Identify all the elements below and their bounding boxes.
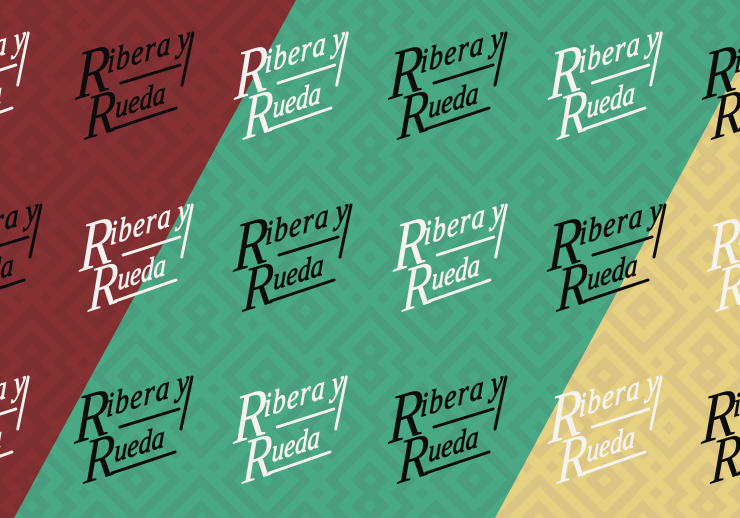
wordmark: row 2 column 3 black: ueda: [273, 248, 324, 297]
wordmark: row 3 column 5 white: y: [640, 361, 659, 405]
wordmark: row 1 column 2 black: R: [74, 28, 112, 116]
wordmark: row 3 column 5 white: ueda: [586, 419, 636, 470]
wordmark: row 1 column 2 black: ueda: [115, 76, 166, 125]
wordmark: row 2 column 4 white: R: [400, 246, 434, 326]
wordmark: row 3 column 4 black: ibera: [420, 367, 486, 425]
wordmark: row 2 column 3 black: R: [241, 246, 275, 326]
wordmark: row 3 column 5 white: R: [555, 418, 589, 498]
wordmark: row 3 column 4 black: R: [396, 418, 430, 498]
wordmark: row 1 column 3 white: ibera: [264, 23, 328, 81]
wordmark: row 3 column 4 black: [387, 348, 506, 498]
wordmark: row 1 column 5 white: y: [640, 17, 659, 61]
wordmark: row 1 column 2 black: y: [170, 18, 191, 61]
wordmark: row 2 column 5 black: [546, 176, 665, 326]
wordmark: row 1 column 4 black: R: [387, 28, 425, 116]
wordmark: row 3 column 4 black: y: [483, 362, 504, 405]
wordmark: row 1 column 3 white: [233, 3, 347, 154]
wordmark: row 1 column 4 black: ueda: [428, 76, 479, 125]
wordmark: row 2 column 1 black: y: [18, 190, 39, 233]
wordmark: row 3 column 1 white: [0, 347, 28, 498]
wordmark: row 1 column 5 white: [547, 3, 661, 154]
wordmark: row 1 column 3 white: ueda: [272, 75, 322, 126]
wordmark: row 3 column 3 white: R: [232, 371, 268, 460]
wordmark: row 3 column 6 black: [700, 348, 740, 498]
wordmark: row 1 column 5 white: R: [555, 74, 589, 154]
wordmark: row 2 column 1 black: [0, 176, 41, 326]
wordmark: row 1 column 5 white: R: [547, 27, 583, 116]
wordmark: row 2 column 2 white: ueda: [117, 247, 167, 298]
wordmark: row 2 column 3 black: y: [328, 190, 349, 233]
panel: dark red diagonal area: [0, 0, 296, 518]
wordmark: row 3 column 2 black: R: [82, 418, 116, 498]
wordmark: row 1 column 4 black: [387, 4, 506, 154]
wordmark: row 2 column 3 black: ibera: [265, 195, 331, 253]
wordmark: row 2 column 5 black: R: [555, 246, 589, 326]
wordmark: row 1 column 4 black: ibera: [420, 23, 486, 81]
wordmark: row 3 column 3 white: R: [240, 418, 274, 498]
wordmark: row 2 column 6 white: [706, 175, 740, 326]
wordmark: row 3 column 2 black: ueda: [114, 420, 165, 469]
wordmark: row 3 column 4 black: R: [387, 372, 425, 460]
wordmark: row 1 column 6 black: [701, 4, 740, 154]
wordmark: row 1 column 3 white: y: [326, 17, 345, 61]
wordmark: row 1 column 3 white: R: [241, 74, 275, 154]
wordmark: row 2 column 3 black: R: [232, 200, 270, 288]
wordmark: row 3 column 2 black: [73, 348, 192, 498]
wordmark: row 1 column 4 black: y: [483, 18, 504, 61]
wordmark: row 3 column 3 white: ibera: [263, 367, 327, 425]
wordmark: row 2 column 4 white: y: [485, 189, 504, 233]
wordmark: row 2 column 2 white: y: [171, 189, 190, 233]
wordmark: row 1 column 4 black: R: [396, 74, 430, 154]
wordmark: row 3 column 2 black: ibera: [106, 367, 172, 425]
wordmark: row 3 column 6 black: R: [700, 372, 738, 460]
wordmark: row 2 column 2 white: ibera: [109, 195, 173, 253]
wordmark: row 1 column 2 black: [74, 4, 193, 154]
wordmark: row 3 column 2 black: y: [169, 362, 190, 405]
wordmark: row 1 column 2 black: ibera: [107, 23, 173, 81]
wordmark: row 3 column 3 white: ueda: [271, 419, 321, 470]
wordmark: row 1 column 1 white: y: [7, 17, 26, 61]
wordmark: row 2 column 2 white: R: [86, 246, 120, 326]
wordmark: row 3 column 4 black: ueda: [428, 420, 479, 469]
wordmark: row 1 column 3 white: R: [233, 27, 269, 116]
wordmark: row 3 column 5 white: ibera: [578, 367, 642, 425]
wordmark: row 2 column 4 white: [392, 175, 506, 326]
wordmark: row 3 column 3 white: [232, 347, 346, 498]
wordmark: row 2 column 2 white: [78, 175, 192, 326]
wordmark: row 1 column 1 white: [0, 3, 28, 154]
wordmark: row 2 column 4 white: ueda: [431, 247, 481, 298]
wordmark: row 3 column 3 white: y: [325, 361, 344, 405]
wordmark: row 1 column 6 black: R: [701, 28, 739, 116]
wordmark: row 3 column 1 white: y: [7, 361, 26, 405]
wordmark: row 1 column 5 white: ueda: [586, 75, 636, 126]
panel: yellow diagonal area: [495, 65, 740, 518]
wordmark: row 2 column 3 black: [232, 176, 351, 326]
wordmark: row 2 column 5 black: y: [642, 190, 663, 233]
wordmark: row 2 column 5 black: ibera: [579, 195, 645, 253]
wordmark: row 1 column 2 black: R: [83, 74, 117, 154]
wordmark: row 2 column 2 white: R: [78, 199, 114, 288]
wordmark: row 3 column 2 black: R: [73, 372, 111, 460]
wordmark: row 3 column 5 white: R: [547, 371, 583, 460]
wordmark: row 2 column 4 white: ibera: [423, 195, 487, 253]
wordmark: row 2 column 4 white: R: [392, 199, 428, 288]
wordmark: row 3 column 5 white: [547, 347, 661, 498]
wordmark: row 2 column 5 black: ueda: [587, 248, 638, 297]
wordmark: row 1 column 5 white: ibera: [578, 23, 642, 81]
wordmark: row 2 column 5 black: R: [546, 200, 584, 288]
